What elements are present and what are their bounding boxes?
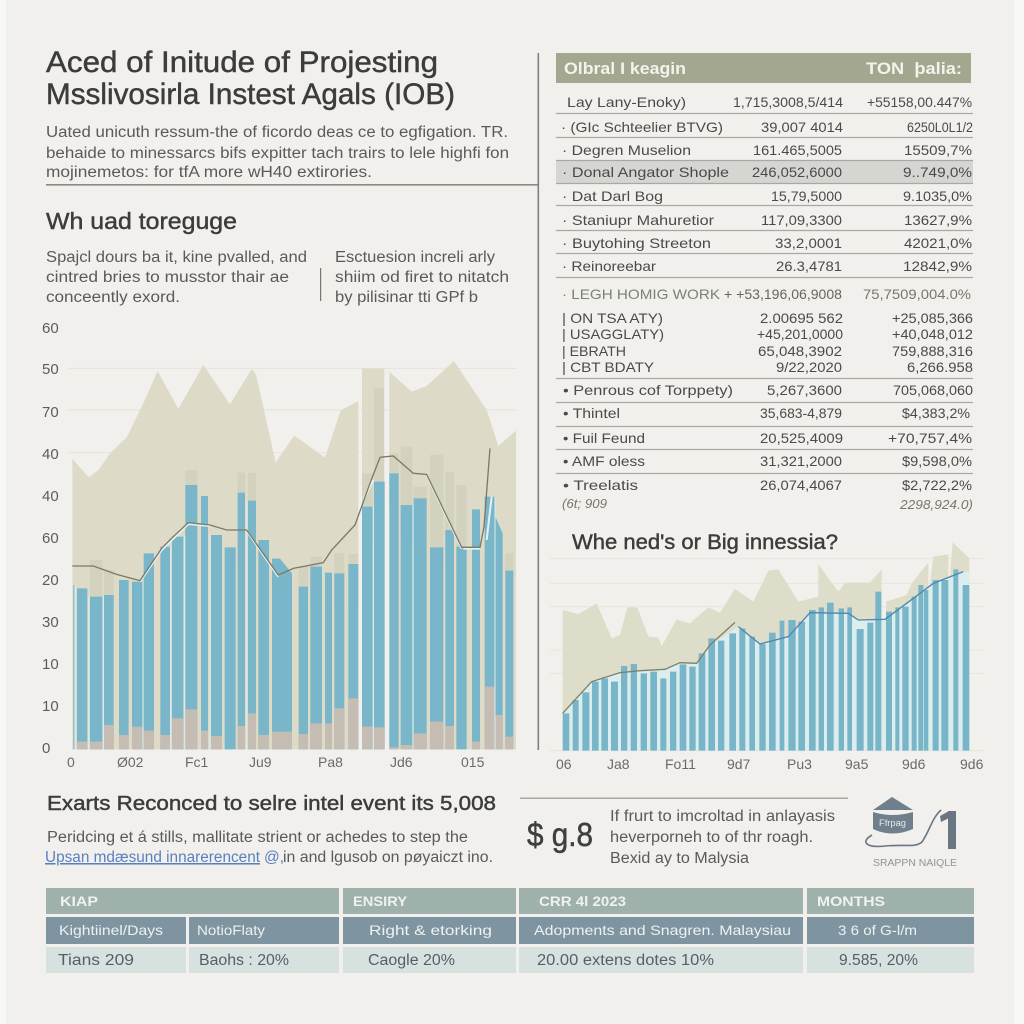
- table data row: Caogle 20%: [368, 952, 455, 969]
- table panel: [556, 53, 973, 512]
- stacked base segments: [77, 687, 513, 749]
- left chart y axis: 20: [42, 572, 59, 589]
- table data row: Tians 209: [58, 952, 134, 969]
- lower rows: • Penrous cof Torppety): [563, 382, 733, 398]
- table rows: · Degren Muselion: [562, 142, 691, 158]
- table rows: 1,715,3008,5/414: [733, 94, 843, 110]
- table footnote: (6t; 909: [562, 496, 607, 511]
- stat description: [610, 808, 835, 867]
- background bars: [90, 388, 513, 607]
- lower rows: • AMF oless: [563, 453, 645, 469]
- left chart y axis: 10: [42, 656, 59, 673]
- stat description: If frurt to imcroltad in anlayasis: [610, 808, 835, 825]
- right chart x axis: 06: [556, 756, 572, 772]
- table rows: 9.1035,0%: [903, 188, 972, 204]
- left chart x axis: Jd6: [390, 754, 413, 770]
- left chart y axis: 10: [42, 698, 59, 715]
- stat description: Bexid ay to Malysia: [610, 850, 749, 867]
- intro text block: behaide to minessarcs bifs expitter tach trairs to lele highfi fon: [46, 145, 509, 162]
- table rows: 42021,0%: [904, 235, 972, 251]
- background area: [72, 361, 516, 749]
- left chart x axis: Ju9: [249, 754, 272, 770]
- title: Aced of Initude of Projesting: [46, 46, 438, 79]
- subtotal row: 75,7509,004.0%: [863, 286, 971, 302]
- right chart x axis: 9d6: [960, 756, 984, 772]
- left column text: cintred bries to musstor thair ae: [46, 269, 289, 286]
- trend line: [563, 572, 963, 713]
- right column text: by pilisinar tti GPf b: [335, 289, 478, 306]
- table rows: 13627,9%: [904, 212, 972, 228]
- left column text: conceently exord.: [46, 289, 180, 306]
- lower rows: 35,683-4,879: [760, 405, 842, 421]
- intro text block: Uated unicuth ressum-the of ficordo deas ce to egfigation. TR.: [46, 124, 508, 141]
- exports text: Upsan mdæsund innarerencent: [45, 849, 261, 866]
- table rows: · Dat Darl Bog: [562, 188, 663, 204]
- left chart: [68, 361, 517, 749]
- icon: logo: Ffrpag: [879, 818, 906, 828]
- right chart heading: Whe ned's or Big innessia?: [572, 531, 838, 554]
- lower rows: 31,321,2000: [760, 453, 842, 469]
- left chart x axis: Fc1: [185, 754, 209, 770]
- left chart x axis: 0: [67, 754, 75, 770]
- right chart x axis: Fo11: [665, 756, 696, 772]
- indented group rows: 2.00695 562: [760, 310, 843, 326]
- indented group rows: [562, 310, 973, 375]
- table sub-header row: 3 6 of G-l/m: [838, 922, 917, 938]
- exports text: Peridcing et á stills, mallitate strient or achedes to step the: [47, 829, 468, 846]
- table sub-header row: [46, 917, 974, 944]
- right chart x axis: 9d7: [727, 756, 751, 772]
- table header: [556, 53, 971, 83]
- left chart x axis: [67, 754, 485, 770]
- table rows: 12842,9%: [903, 258, 972, 274]
- right column text: shiim od firet to nitatch: [335, 269, 509, 286]
- table data row: Baohs : 20%: [199, 952, 289, 969]
- table rows: 161.465,5005: [753, 142, 842, 158]
- left chart x axis: 015: [461, 754, 485, 770]
- table footnote: [562, 496, 973, 512]
- indented group rows: +25,085,366: [892, 310, 973, 326]
- big stat: $ g.8: [527, 816, 593, 853]
- table rows: 6250L0L1/2: [907, 119, 973, 135]
- right chart x axis: 9a5: [845, 756, 869, 772]
- left chart y axis: 40: [42, 488, 59, 505]
- lower rows: +70,757,4%: [888, 430, 972, 446]
- table rows: · Staniupr Mahuretior: [562, 212, 714, 228]
- indented group rows: | EBRATH: [562, 343, 626, 359]
- indented group rows: +40,048,012: [892, 326, 973, 342]
- icon: logo: [866, 797, 957, 869]
- lower rows: $9,598,0%: [902, 453, 972, 469]
- indented group rows: | USAGGLATY): [562, 326, 664, 342]
- table rows: · (GIc Schteelier BTVG): [561, 119, 723, 135]
- table header row: ENSIRY: [353, 894, 407, 909]
- lower rows: 5,267,3600: [767, 382, 842, 398]
- subtotal row: + +53,196,06,9008: [724, 286, 842, 302]
- lower rows: [563, 382, 973, 493]
- left chart y axis: 0: [42, 740, 50, 757]
- table rows: 117,09,3300: [761, 212, 842, 228]
- lower rows: $2,722,2%: [902, 477, 972, 493]
- lower rows: • Fuil Feund: [563, 430, 645, 446]
- table header row: [46, 888, 974, 914]
- left chart y axis: 40: [42, 446, 59, 463]
- table header: TON þalia:: [866, 59, 962, 78]
- lower rows: 26,074,4067: [760, 477, 842, 493]
- table rows: [561, 94, 973, 274]
- subheading: Wh uad toreguge: [46, 208, 237, 234]
- left chart y axis: 50: [42, 361, 59, 378]
- lower rows: 705,068,060: [893, 382, 973, 398]
- table rows: · Reinoreebar: [562, 258, 656, 274]
- lower rows: • Thintel: [563, 405, 620, 421]
- table data row: [46, 947, 974, 973]
- pale band under trend: [563, 572, 969, 751]
- title: Msslivosirla Instest Agals (IOB): [46, 78, 455, 111]
- blue bars: [73, 473, 513, 749]
- table header: Olbral I keagin: [564, 59, 686, 78]
- table sub-header row: Adopments and Snagren. Malaysiau: [534, 922, 791, 938]
- right column text: [335, 249, 509, 306]
- table sub-header row: Right & etorking: [369, 922, 492, 938]
- table rows: 33,2,0001: [775, 235, 842, 251]
- left chart x axis: Ø02: [117, 754, 144, 770]
- table data row: 9.585, 20%: [839, 952, 918, 969]
- left column text: [46, 249, 307, 306]
- stat description: heverporneh to of thr roagh.: [610, 829, 813, 846]
- bottom table: [46, 888, 974, 973]
- left chart x axis: Pa8: [318, 754, 343, 770]
- indented group rows: | ON TSA ATY): [562, 310, 663, 326]
- table header row: KIAP: [60, 894, 98, 909]
- exports text: in and lgusob on pøyaiczt ino.: [283, 849, 493, 866]
- table header row: CRR 4l 2023: [539, 894, 627, 909]
- intro text block: mojinemetos: for tfA more wH40 extirories.: [46, 164, 372, 181]
- exports text: @,: [264, 849, 284, 866]
- table rows: Lay Lany-Enoky): [567, 94, 686, 110]
- exports heading: Exarts Reconced to selre intel event its 5,008: [47, 793, 496, 815]
- table sub-header row: Kightiinel/Days: [59, 922, 163, 938]
- left chart y axis: 30: [42, 614, 59, 631]
- left chart y axis: 70: [42, 404, 59, 421]
- table rows: +55158,00.447%: [867, 94, 972, 110]
- right chart x axis: [556, 756, 984, 772]
- lower rows: $4,383,2%: [902, 405, 970, 421]
- table rows: 39,007 4014: [761, 119, 843, 135]
- table rows: 15509,7%: [904, 142, 972, 158]
- table sub-header row: NotioFlaty: [197, 922, 265, 938]
- left chart y axis: 60: [42, 320, 59, 337]
- background area: [563, 542, 969, 751]
- subtotal row: [562, 286, 971, 302]
- table header row: MONTHS: [817, 894, 885, 909]
- indented group rows: 65,048,3902: [758, 343, 842, 359]
- lower rows: 20,525,4009: [760, 430, 843, 446]
- left chart y axis: 60: [42, 530, 59, 547]
- blue bars: [563, 569, 969, 751]
- right chart x axis: Ja8: [607, 756, 630, 772]
- left chart y axis: [42, 320, 59, 757]
- indented group rows: | CBT BDATY: [562, 359, 655, 375]
- title: [46, 46, 455, 111]
- table rows: 9..749,0%: [903, 164, 972, 180]
- right column text: Esctuesion increli arly: [335, 249, 495, 266]
- indented group rows: 6,266.958: [907, 359, 973, 375]
- right chart x axis: 9d6: [902, 756, 926, 772]
- table rows: · Donal Angator Shople: [562, 164, 729, 180]
- indented group rows: 759,888,316: [892, 343, 973, 359]
- table rows: 26.3,4781: [776, 258, 842, 274]
- right chart: [550, 542, 983, 751]
- subtotal row: · LEGH HOMIG WORK: [562, 286, 721, 302]
- table rows: 15,79,5000: [771, 188, 842, 204]
- table rows: · Buytohing Streeton: [562, 235, 711, 251]
- lower rows: • Treelatis: [563, 477, 638, 493]
- indented group rows: 9/22,2020: [776, 359, 842, 375]
- exports text: [45, 829, 493, 866]
- left column text: Spajcl dours ba it, kine pvalled, and: [46, 249, 307, 266]
- indented group rows: +45,201,0000: [757, 326, 843, 342]
- table footnote: 2298,924.0): [899, 497, 973, 512]
- right chart x axis: Pu3: [787, 756, 812, 772]
- table rows: 246,052,6000: [752, 164, 842, 180]
- light gaps: [75, 497, 495, 749]
- trend line: [72, 448, 492, 582]
- intro text block: [46, 124, 509, 181]
- table data row: 20.00 extens dotes 10%: [537, 952, 714, 969]
- icon: logo: SRAPPN NAIQLE: [873, 858, 957, 869]
